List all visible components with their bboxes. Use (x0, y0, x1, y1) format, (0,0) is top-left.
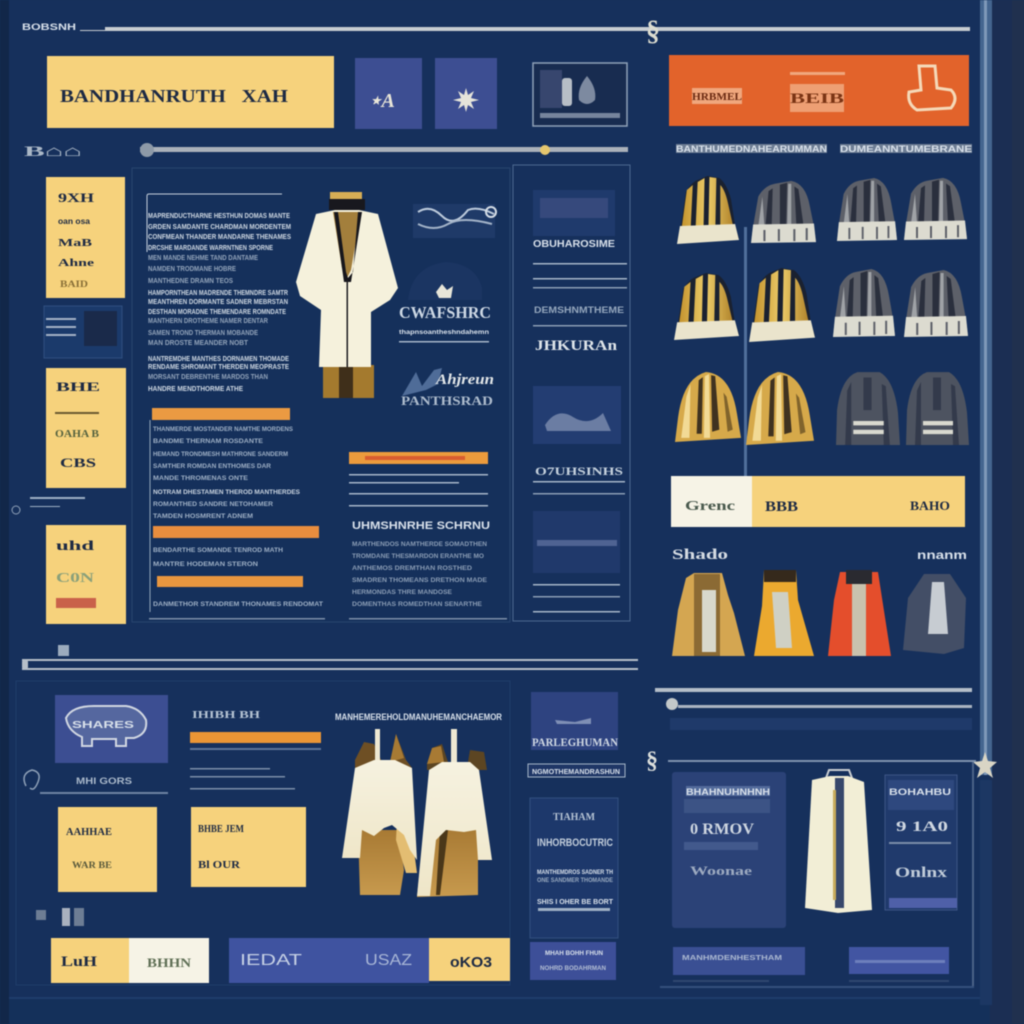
orange bar 2 (153, 526, 319, 538)
yellow card 1: MaB (58, 238, 93, 249)
icon tile: sprig (355, 58, 422, 129)
lower right panel: price card 2 (885, 775, 957, 910)
small panel with square (44, 306, 122, 358)
item: blue tile with caption (528, 692, 625, 777)
emblem 3 with label (401, 368, 494, 408)
text block: description (147, 194, 291, 393)
text block: description: MAPRENDUCTHARNE HESTHUN DOMAS MANTE (148, 211, 290, 220)
text block: lower left column: ROMANTHED SANDRE NETOHAMER (153, 501, 273, 508)
lower right panel: price card: Woonae (690, 863, 752, 878)
emblem 3 with label: Ahjreun (435, 372, 494, 388)
yellow card 2: CBS (60, 455, 96, 470)
item: text panel: ONE SANDMER THOMANDE (537, 878, 613, 884)
item: blue note: NOHRD BODAHRMAN (540, 966, 606, 972)
item: blue tile with caption: NGMOTHEMANDRASHUN (532, 769, 620, 776)
lower right blue label 2 (849, 947, 949, 982)
yellow card 2: OAHA B (55, 429, 99, 440)
item: text panel: MANTHEMDROS SADNER TH (537, 870, 613, 876)
top header rule (22, 16, 970, 47)
orange bar 1 (152, 408, 290, 420)
garment row 2 (674, 268, 968, 342)
yellow card 5: Bl OUR (198, 860, 241, 871)
text block: description: DESTHAN MORADNE THEMENDARE ROMNDATE (148, 307, 286, 316)
top header rule: § (646, 16, 660, 47)
text block: description: DRCSHE MARDANDE WARRNTNEN SPORNE (148, 243, 273, 252)
item: text panel: SHIS I OHER BE BORT (537, 899, 614, 906)
garment row 3 (675, 372, 969, 445)
yellow card 1: BAID (60, 279, 89, 289)
lower right blue label 1: MANHMDENHESTHAM (682, 955, 782, 962)
emblem 1 (413, 204, 496, 238)
coat left (342, 729, 417, 895)
orange bar 3 (157, 576, 303, 587)
garment: long white robe (805, 770, 872, 913)
yellow card 1: 9XH (58, 190, 94, 205)
text block: lower left column: MANTRE HODEMAN STERON (153, 561, 258, 568)
text block: lower left column: BENDARTHE SOMANDE TENROD MATH (153, 547, 283, 554)
emblem tile: animal (55, 695, 168, 763)
text block: lower left column: DANMETHOR STANDREM THONAMES RENDOMAT (153, 601, 323, 608)
text block: lower left column: THANMERDE MOSTANDER NAMTHE MORDENS (153, 426, 294, 433)
bottom bar: blue and yellow: oKO3 (450, 954, 492, 971)
yellow card 5 (191, 807, 306, 887)
bottom bar: yellow and white: BHHN (147, 955, 192, 970)
text block: description: GRDEN SAMDANTE CHARDMAN MORDENTEM (148, 222, 291, 231)
yellow card 4: AAHHAE (66, 827, 112, 838)
callout bar: white and yellow: BBB (765, 499, 798, 515)
garment: white coat (296, 192, 398, 398)
item: text panel (530, 798, 618, 938)
text block: description: MAN DROSTE MEANDER NOBT (148, 338, 248, 347)
yellow card 3: uhd (56, 539, 94, 554)
subheads above hat grid (676, 144, 972, 154)
text block: description: MANTHERN DROTHEME NAMER DENTAR (148, 316, 268, 325)
item: text panel: INHORBOCUTRIC (537, 837, 613, 849)
bottom bar: blue and yellow (229, 938, 510, 983)
lower right blue label 1 (673, 947, 805, 982)
bottom bar: blue and yellow: USAZ (365, 952, 412, 969)
lower right panel: price card 2: Onlnx (895, 865, 948, 881)
center panel backdrop (132, 168, 510, 622)
section rule: left (24, 143, 628, 160)
caption above coats: MANHEMEREHOLDMANUHEMANCHAEMOR (335, 712, 502, 722)
bottom bar: yellow and white: LuH (61, 954, 97, 970)
garment: orange (754, 570, 814, 656)
garment row 1 (677, 176, 967, 244)
grid: pleated garments (674, 176, 969, 445)
banner: orange: HRBMEL (692, 91, 742, 103)
lower left panel backdrop (16, 681, 510, 985)
yellow card 1 (46, 177, 125, 298)
text block: description: NANTREMDHE MANTHES DORNAMEN THOMADE (148, 354, 289, 363)
icon tile: flower (435, 58, 497, 129)
right lower column (528, 692, 625, 980)
lower right panel: price card (672, 772, 786, 928)
callout bar: white and yellow (671, 476, 965, 527)
yellow card 5: BHBE JEM (198, 824, 244, 835)
section rule: lower right (655, 688, 972, 730)
small garment labels: nnanm (917, 548, 967, 562)
coat right (417, 729, 492, 897)
side item 1: OBUHAROSIME (533, 239, 615, 250)
yellow card 3: C0N (56, 571, 94, 586)
item: blue tile with caption: PARLEGHUMAN (532, 735, 618, 749)
item: blue note: MHAH BOHH FHUN (545, 951, 603, 957)
text block: lower left column: TAMDEN HOSMRENT ADNEM (153, 513, 253, 520)
text block: lower middle column: ANTHEMOS DREMTHAN ROSTHED (352, 566, 473, 572)
grid divider (744, 227, 747, 477)
text block: lower left column: BANDME THERNAM ROSDANTE (153, 438, 264, 445)
lower right panel: price card: BHAHNUHNHNH (686, 787, 770, 797)
side item 1 (533, 190, 627, 354)
text block: lower middle column: DOMENTHAS ROMEDTHAN SENARTHE (352, 602, 482, 608)
yellow card 4 (58, 807, 157, 892)
garment: slate (903, 574, 966, 654)
text block: lower middle column: SMADREN THOMEANS DRETHON MADE (352, 578, 487, 584)
small caption with ornament: MHI GORS (76, 776, 132, 786)
text block: lower left column: NOTRAM DHESTAMEN THEROD MANTHERDES (153, 489, 301, 496)
vertical rail and star (973, 0, 997, 1005)
text block: lower middle column (349, 452, 507, 620)
garments: paired coats (342, 729, 492, 897)
side column panel (513, 165, 630, 621)
side item 2: O7UHSINHS (535, 464, 623, 478)
small rule beside card (12, 497, 85, 514)
text block: description: MANTHEDNE DRAMN TEOS (148, 276, 233, 285)
banner: yellow title: BANDHANRUTH XAH (60, 86, 288, 106)
side item 3 (533, 511, 620, 612)
emblem 2 with label: thapnsoantheshndahemn (399, 329, 489, 336)
lower right frame: § (646, 748, 658, 774)
emblem 2 with label: CWAFSHRC (399, 303, 491, 322)
emblem tile: animal: SHARES (72, 720, 134, 731)
text block: description: RENDAME SHROMANT THERDEN MEOPRASTE (148, 362, 289, 371)
text block with orange bar (190, 709, 321, 790)
item: text panel: TIAHAM (553, 811, 596, 823)
section rule: lower left (22, 645, 638, 670)
emblem 2 with label (399, 262, 491, 342)
text block: lower middle column: UHMSHNRHE SCHRNU (352, 520, 490, 532)
banner: orange: BEIB (790, 91, 844, 107)
small garment labels: Shado (672, 547, 728, 563)
callout bar: white and yellow: BAHO (910, 498, 950, 513)
banner: orange (669, 55, 969, 126)
section rule: left: B⌂⌂ (24, 144, 82, 160)
text block with orange bar: IHIBH BH (192, 709, 261, 721)
yellow card 3 (46, 525, 126, 624)
yellow card 2 (46, 368, 126, 488)
text block: lower left column: MANDE THROMENAS ONTE (153, 475, 249, 482)
side item 1: DEMSHNMTHEME (534, 305, 624, 315)
yellow card 2: BHE (56, 379, 100, 394)
text block: lower left column: SAMTHER ROMDAN ENTHOMES DAR (153, 463, 271, 470)
icon tile: sprig: ⋆A (369, 90, 395, 112)
text block: lower left column: HEMAND TRONDMESH MATHRONE SANDERM (153, 451, 288, 458)
text block: description: MEANTHREN DORMANTE SADNER MEBRSTAN (148, 297, 288, 306)
side item 1: JHKURAn (535, 338, 618, 354)
small garment labels (672, 547, 967, 563)
item: blue note (530, 942, 616, 980)
bottom bar: blue and yellow: IEDAT (240, 952, 302, 969)
banner: yellow title (47, 56, 334, 128)
subheads above hat grid: BANTHUMEDNAHEARUMMAN (676, 144, 827, 154)
garment: tan (672, 573, 745, 656)
small icons near bottom left (36, 908, 84, 926)
emblem 3 with label: PANTHSRAD (401, 393, 493, 408)
yellow card 1: oan osa (58, 217, 91, 226)
text block: lower middle column: TROMDANE THESMARDON ERANTHE MO (352, 554, 484, 560)
icon box: device (533, 63, 627, 126)
coloured garments row (672, 570, 966, 656)
text block: description: HAMPORNTHEAN MADRENDE THEMNDRE SAMTR (148, 288, 288, 297)
side item 2 (533, 386, 625, 494)
bottom bar: yellow and white (51, 938, 209, 983)
subheads above hat grid: DUMEANNTUMEBRANE (840, 144, 972, 154)
lower right panel: price card 2: 9 1A0 (896, 819, 948, 835)
text block: description: SAMEN TROND THERMAN MOBANDE (148, 328, 258, 337)
text block: lower left column (149, 420, 325, 620)
small caption with ornament (24, 770, 168, 794)
text block: description: MORSANT DEBRENTHE MARDOS THAN (148, 372, 268, 381)
callout bar: white and yellow: Grenc (685, 499, 735, 514)
text block: description: HANDRE MENDTHORME ATHE (148, 384, 243, 393)
lower right panel: price card: 0 RMOV (690, 821, 754, 838)
yellow card 1: Ahne (58, 258, 95, 269)
top header rule: BOBSNH (22, 22, 76, 32)
lower right panel: price card 2: BOHAHBU (889, 787, 951, 797)
garment: red (828, 570, 891, 656)
text block: lower middle column: MARTHENDOS NAMTHERDE SOMADTHEN (352, 542, 487, 548)
text block: lower middle column: HERMONDAS THRE MANDOSE (352, 590, 452, 596)
text block: description: CONFMEAN THANDER MANDARNE THENAMES (148, 232, 291, 241)
text block: description: MEN MANDE NEHME TAND DANTAME (148, 253, 258, 262)
text block: description: NAMDEN TRODMANE HOBRE (148, 264, 236, 273)
yellow card 4: WAR BE (72, 860, 112, 870)
